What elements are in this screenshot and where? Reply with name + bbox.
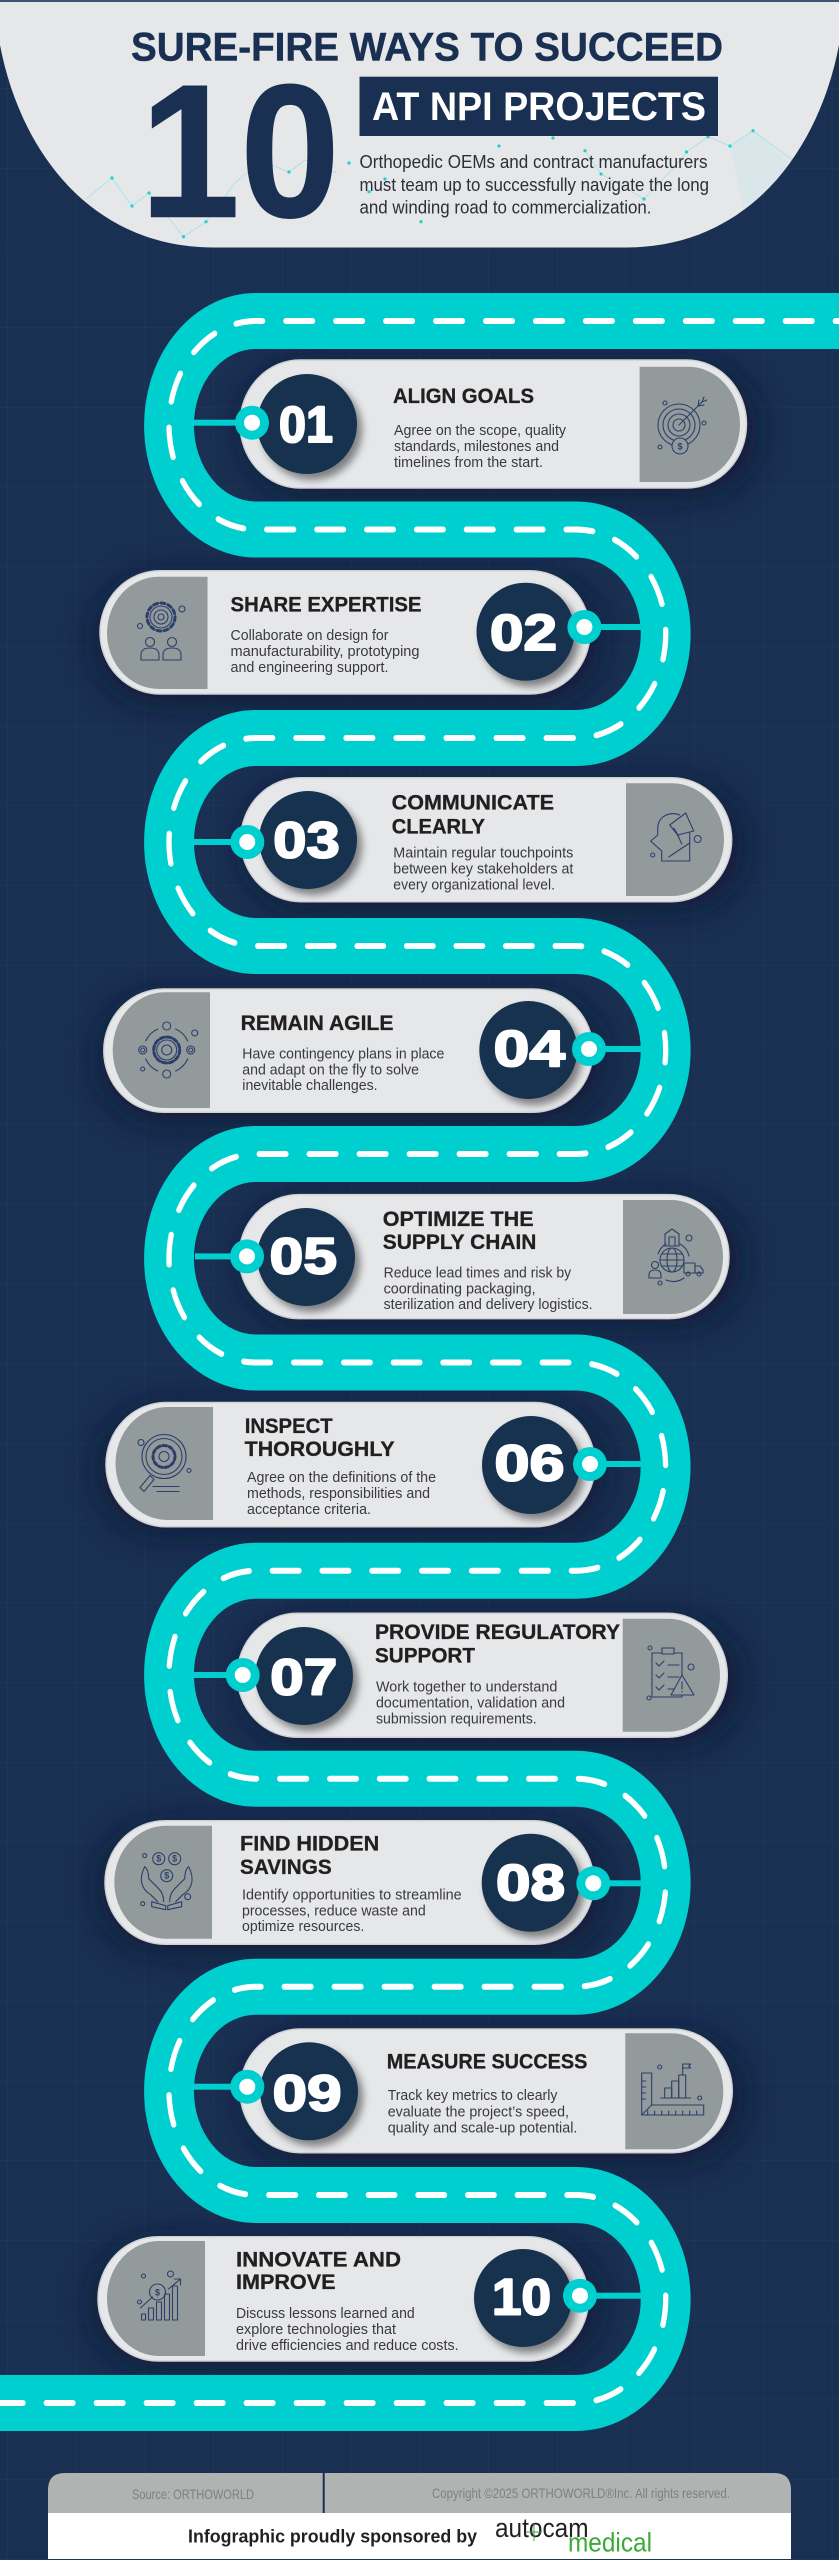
step 08: find hidden savings	[105, 1821, 641, 1944]
card shadows	[94, 366, 756, 2366]
icon panel	[116, 1407, 213, 1520]
card body	[241, 778, 732, 902]
logo: autocam medical: medical	[568, 2528, 652, 2558]
step description	[230, 628, 420, 676]
connector	[193, 406, 269, 440]
step 01: align goals	[193, 360, 746, 488]
step description	[376, 1680, 565, 1727]
card body	[98, 2237, 588, 2361]
step description: processes, reduce waste and	[242, 1903, 426, 1919]
step description: Reduce lead times and risk by	[384, 1266, 572, 1282]
step title: REMAIN AGILE	[241, 1012, 393, 1035]
step 03: communicate clearly	[194, 778, 732, 902]
step description: standards, milestones and	[394, 439, 559, 455]
number badge	[474, 2249, 572, 2347]
icon panel	[623, 1619, 720, 1732]
card body	[100, 571, 590, 694]
connector	[572, 1032, 641, 1066]
connector	[576, 1866, 641, 1900]
step description	[236, 2306, 459, 2354]
step description	[384, 1266, 593, 1313]
number badge	[257, 374, 357, 474]
header decorative line chart	[86, 129, 800, 238]
intro text	[360, 152, 709, 217]
title line: SURE-FIRE WAYS TO SUCCEED	[131, 26, 723, 70]
title banner: AT NPI PROJECTS	[372, 85, 706, 129]
step description	[393, 845, 573, 893]
icon panel	[640, 367, 740, 482]
step number: 03	[273, 812, 340, 868]
step number: 02	[490, 604, 557, 661]
step title: FIND HIDDEN	[240, 1833, 379, 1856]
step description: manufacturability, prototyping	[230, 644, 420, 660]
step title: SUPPORT	[375, 1644, 475, 1667]
card body	[104, 989, 593, 1112]
step description: Discuss lessons learned and	[236, 2306, 415, 2322]
footer	[48, 2473, 791, 2559]
intro text: and winding road to commercialization.	[360, 197, 652, 217]
step description: drive efficiencies and reduce costs.	[236, 2338, 459, 2354]
icon panel	[626, 783, 724, 896]
header panel	[0, 0, 839, 258]
icon: growth chart: $	[155, 2288, 160, 2298]
step description	[242, 1046, 444, 1094]
step title: SHARE EXPERTISE	[230, 594, 422, 617]
number badge	[479, 1001, 577, 1099]
number badge	[257, 1208, 355, 1306]
icon panel	[114, 1826, 212, 1939]
icon: head with megaphone	[651, 813, 701, 861]
step description: acceptance criteria.	[247, 1502, 371, 1518]
icon panel	[113, 992, 210, 1108]
connector	[195, 1239, 264, 1273]
icon: gear with arrows	[139, 1022, 198, 1078]
step 05: optimize the supply chain	[195, 1195, 729, 1319]
step title: CLEARLY	[392, 815, 485, 838]
step title: PROVIDE REGULATORY	[375, 1621, 620, 1644]
number badge	[476, 583, 574, 681]
step title: INNOVATE AND	[236, 2249, 401, 2272]
icon: target with coin	[658, 397, 707, 454]
icon: target with coin: $	[677, 442, 683, 452]
icon: magnifier with gear	[138, 1434, 191, 1492]
intro text: Orthopedic OEMs and contract manufacturers	[360, 152, 708, 172]
icon panel	[107, 577, 208, 689]
step description: and engineering support.	[230, 660, 388, 676]
step description: Agree on the scope, quality	[394, 423, 567, 439]
step description	[394, 423, 567, 471]
icon panel	[107, 2241, 205, 2356]
step description: timelines from the start.	[394, 455, 543, 471]
connector	[567, 610, 641, 644]
step title: OPTIMIZE THE	[383, 1208, 534, 1231]
step description: quality and scale-up potential.	[388, 2120, 577, 2136]
card body	[237, 1613, 727, 1737]
step description: Collaborate on design for	[230, 628, 389, 644]
card body	[240, 360, 746, 488]
source bar	[48, 2473, 791, 2513]
step title: MEASURE SUCCESS	[387, 2050, 587, 2073]
icon panel	[625, 2033, 723, 2149]
step number: 06	[494, 1434, 564, 1492]
step title: COMMUNICATE	[392, 791, 554, 814]
connector	[563, 2279, 641, 2313]
logo: autocam medical	[495, 2513, 652, 2558]
step title	[240, 1833, 379, 1879]
number badge	[482, 1416, 580, 1514]
step number: 09	[273, 2064, 342, 2122]
card body	[105, 1821, 594, 1944]
step title	[236, 2249, 401, 2294]
step title	[392, 791, 554, 838]
header top rule	[0, 0, 839, 2]
step description	[247, 1470, 436, 1518]
number badge	[259, 791, 357, 889]
connector	[194, 2070, 264, 2104]
icon: hands and coins	[141, 1853, 192, 1910]
connector	[194, 825, 264, 859]
step title: ALIGN GOALS	[393, 385, 534, 408]
step description: methods, responsibilities and	[247, 1486, 430, 1502]
source divider	[323, 2473, 325, 2513]
step title: SUPPLY CHAIN	[383, 1231, 536, 1254]
step number: 10	[492, 2268, 551, 2326]
step description: submission requirements.	[376, 1711, 537, 1727]
step 06: inspect thoroughly	[106, 1402, 641, 1527]
source text: Source: ORTHOWORLD	[132, 2486, 254, 2502]
connector	[194, 1658, 260, 1692]
step description: Identify opportunities to streamline	[242, 1887, 462, 1903]
step description: inevitable challenges.	[242, 1078, 378, 1094]
step number: 05	[270, 1228, 337, 1284]
step description: Have contingency plans in place	[242, 1046, 444, 1062]
step description	[388, 2088, 577, 2136]
icon: globe and logistics	[649, 1229, 703, 1285]
step 02: share expertise	[100, 571, 641, 694]
icon: hands and coins: $	[172, 1854, 177, 1864]
step 07: provide regulatory support	[194, 1613, 727, 1737]
step description: between key stakeholders at	[393, 861, 573, 877]
number badge	[482, 1834, 580, 1932]
number badge	[260, 2042, 358, 2140]
step title	[383, 1208, 536, 1254]
step description: optimize resources.	[242, 1919, 364, 1935]
icon: gear and people	[138, 603, 185, 660]
step description: Track key metrics to clearly	[388, 2088, 558, 2104]
step title: SAVINGS	[240, 1856, 332, 1879]
step title: INSPECT	[245, 1415, 333, 1438]
step description: every organizational level.	[393, 877, 555, 893]
logo: autocam medical: autocam	[495, 2513, 588, 2543]
step number: 07	[270, 1648, 337, 1706]
sponsor text: Infographic proudly sponsored by	[188, 2527, 477, 2547]
step description: Maintain regular touchpoints	[393, 845, 573, 861]
icon: ruler and bar chart	[642, 2064, 704, 2115]
icon: growth chart	[138, 2271, 180, 2320]
step title: IMPROVE	[236, 2271, 336, 2294]
step 10: innovate and improve	[98, 2237, 641, 2361]
step number: 08	[496, 1854, 565, 1911]
step description: coordinating packaging,	[384, 1282, 536, 1298]
step title	[245, 1415, 395, 1461]
step description: and adapt on the fly to solve	[242, 1062, 419, 1078]
step 09: measure success	[194, 2029, 732, 2153]
copyright text: Copyright ©2025 ORTHOWORLD®Inc. All rights reserved.	[432, 2485, 730, 2501]
icon panel	[623, 1200, 723, 1314]
card body	[106, 1402, 595, 1527]
step number: 01	[279, 396, 333, 453]
intro text: must team up to successfully navigate the long	[360, 175, 709, 195]
step number: 04	[494, 1020, 566, 1077]
icon: clipboard with warning	[647, 1646, 694, 1700]
step description	[242, 1887, 462, 1935]
sponsor strip	[48, 2513, 791, 2559]
connector	[573, 1447, 641, 1481]
step title: THOROUGHLY	[245, 1438, 395, 1461]
step description: documentation, validation and	[376, 1696, 565, 1712]
icon: hands and coins: $	[156, 1854, 161, 1864]
header background shape	[0, 2, 839, 248]
card body	[239, 1195, 729, 1319]
step description: Agree on the definitions of the	[247, 1470, 436, 1486]
step description: explore technologies that	[236, 2322, 396, 2338]
step title	[375, 1621, 620, 1667]
step 04: remain agile	[104, 989, 641, 1112]
big number 10: 10	[140, 46, 340, 258]
step description: Work together to understand	[376, 1680, 557, 1696]
number badge	[255, 1627, 353, 1725]
card body	[240, 2029, 732, 2153]
icon: hands and coins: $	[164, 1871, 169, 1881]
step description: evaluate the project’s speed,	[388, 2105, 569, 2121]
step description: sterilization and delivery logistics.	[384, 1297, 593, 1313]
